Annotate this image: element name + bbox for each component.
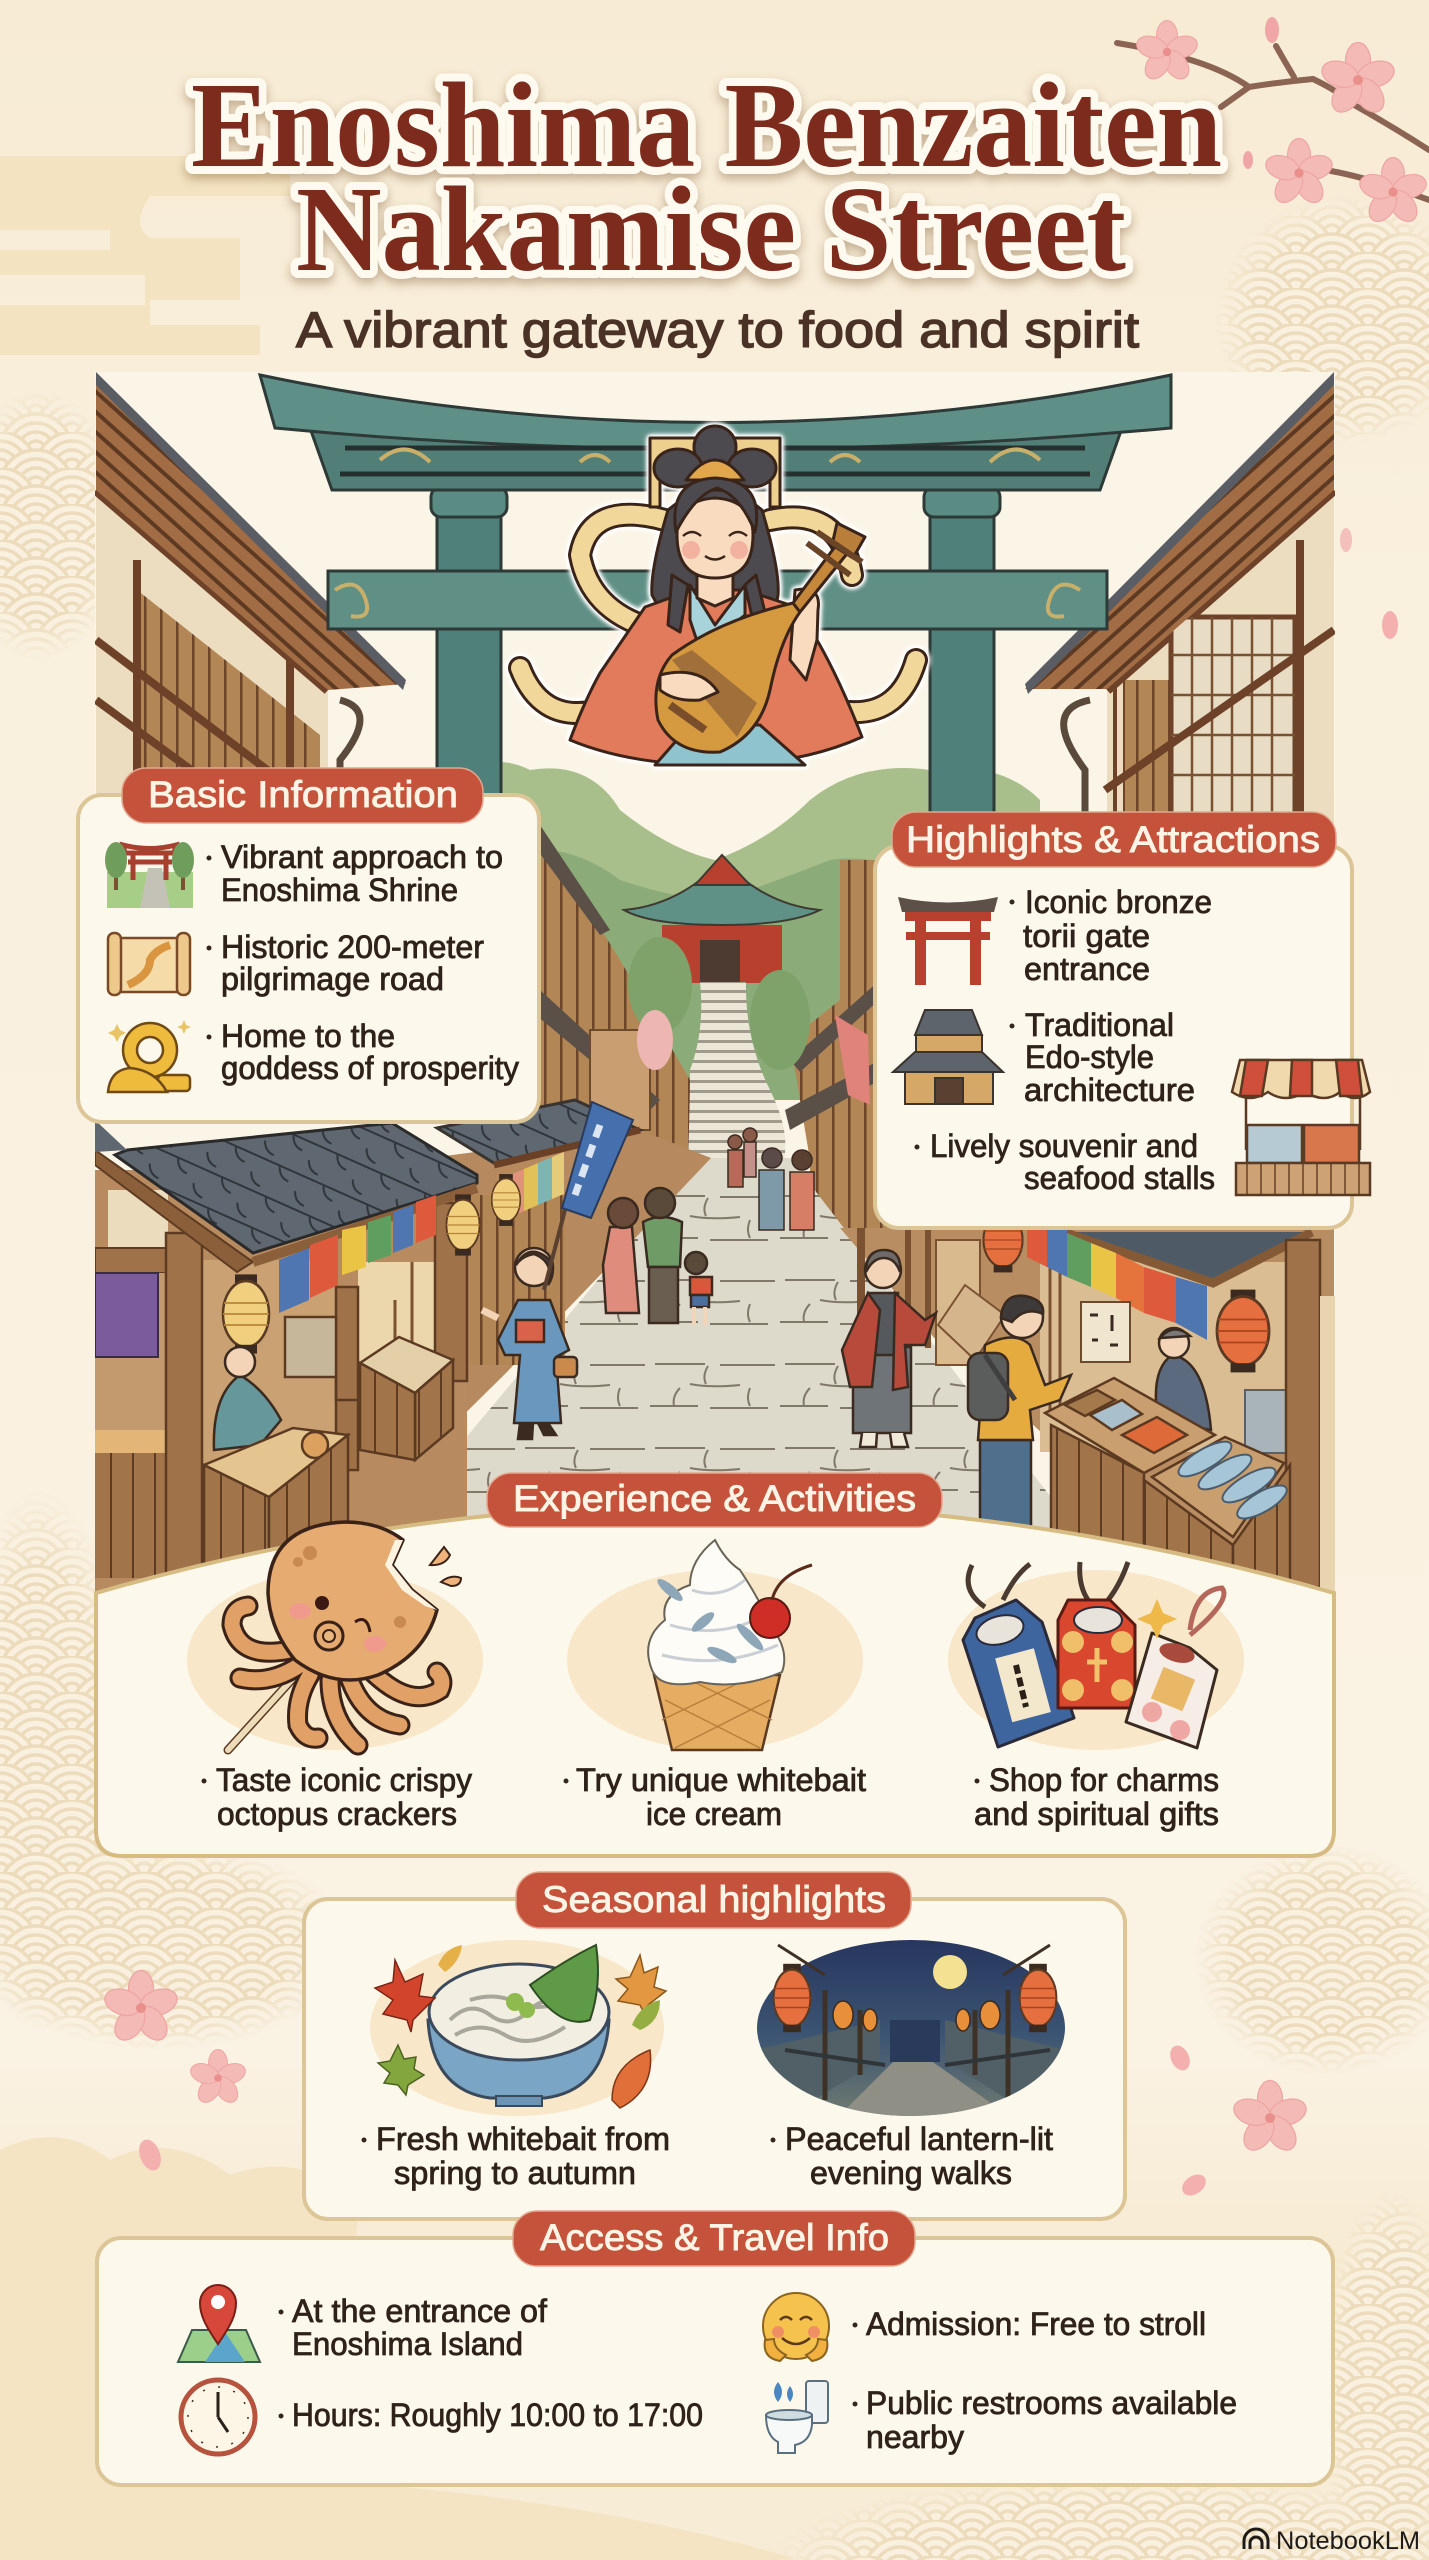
text: restrooms: Public restrooms available: [866, 2385, 1237, 2421]
icon: edo building: [893, 1010, 1003, 1104]
wave pattern lower left: [0, 1858, 316, 2044]
decorative gold cloud top left: [0, 156, 290, 355]
icon: market stall: [1232, 1060, 1370, 1195]
title: Enoshima Benzaiten: [191, 58, 1222, 193]
title: Nakamise Street: [296, 162, 1126, 297]
bunting: [279, 1248, 309, 1313]
text: iconic torii: torii gate: [1023, 918, 1150, 954]
lanterns right: [1217, 1290, 1269, 1372]
text: lantern walks: [770, 2121, 1053, 2191]
text: charms: Shop for charms: [989, 1762, 1219, 1798]
text: lantern walks: evening walks: [810, 2155, 1012, 2191]
text: octopus crackers: [202, 1762, 472, 1832]
text: hours: Hours: Roughly 10:00 to 17:00: [292, 2397, 703, 2433]
wave pattern top right: [1226, 206, 1429, 436]
subtitle: A vibrant gateway to food and spirit: [296, 302, 1139, 358]
text: octopus crackers: octopus crackers: [217, 1796, 457, 1832]
face: [697, 572, 733, 606]
text: whitebait season: Fresh whitebait from: [376, 2121, 670, 2157]
pill: experience: [487, 1473, 942, 1527]
lanterns left: [223, 1274, 269, 1354]
icon: scroll map: [108, 933, 190, 995]
icon: map pin: [178, 2285, 260, 2362]
text: traditional edo: [1010, 1007, 1195, 1108]
icon: smiling face: [763, 2293, 829, 2361]
ribbons: [520, 515, 916, 713]
family walking: [603, 1188, 712, 1325]
text: vibrant approach: Enoshima Shrine: [221, 872, 458, 908]
pill: access: Access & Travel Info: [540, 2217, 889, 2258]
pill: basic information: Basic Information: [148, 774, 458, 815]
icon: clock: [181, 2380, 255, 2454]
right vendor: [1156, 1328, 1211, 1430]
text: lantern walks: Peaceful lantern-lit: [785, 2121, 1053, 2157]
left vendor: [214, 1347, 281, 1450]
wave pattern bottom: [803, 2487, 1429, 2560]
panel: basic information: [78, 768, 539, 1122]
title: [191, 58, 1222, 297]
text: charms: and spiritual gifts: [974, 1796, 1219, 1832]
stone stairs: [688, 982, 785, 1160]
lower right shop: [840, 1228, 1335, 1600]
text: entrance: [278, 2293, 547, 2362]
text: iconic torii: entrance: [1024, 951, 1150, 987]
wave pattern bottom right: [1334, 2209, 1429, 2536]
icon: lantern-lit evening walk: [757, 1940, 1065, 2120]
bronze torii gate: [260, 375, 1171, 835]
far shops left wall: [433, 1098, 711, 1412]
lower gold cloud band: [0, 2137, 800, 2560]
icon: shrine path: [105, 842, 194, 908]
text: souvenir stalls: [914, 1128, 1215, 1196]
wave pattern right: [1195, 1845, 1429, 2075]
text: vibrant approach: [206, 839, 503, 908]
text: admission: Admission: Free to stroll: [866, 2306, 1206, 2342]
text: restrooms: nearby: [866, 2419, 964, 2455]
icon: red torii: [898, 897, 998, 985]
left stalls: [204, 1317, 453, 1585]
forest hills: [502, 762, 1040, 895]
text: whitebait ice cream: Try unique whitebait: [576, 1762, 866, 1798]
street scene illustration: [95, 372, 1335, 1600]
text: home to goddess: Home to the: [221, 1018, 395, 1054]
goddess Benzaiten with biwa: [520, 426, 916, 765]
text: historic road: [206, 929, 484, 997]
pill: seasonal: Seasonal highlights: [542, 1879, 886, 1920]
text: octopus crackers: Taste iconic crispy: [216, 1762, 472, 1798]
text: entrance: At the entrance of: [292, 2293, 547, 2329]
robe: [570, 590, 862, 765]
text: traditional edo: Edo-style: [1025, 1039, 1154, 1075]
text: whitebait ice cream: [564, 1762, 866, 1832]
panel: seasonal highlights: [304, 1872, 1125, 2219]
panel: highlights and attractions: [875, 812, 1370, 1228]
hair strands front: [668, 575, 768, 632]
text: souvenir stalls: seafood stalls: [1024, 1160, 1215, 1196]
decorative sakura blossoms: [101, 528, 1398, 2200]
icon: whitebait bowl with leaves: [370, 1940, 666, 2116]
pill: access: [513, 2211, 915, 2266]
text: vibrant approach: Vibrant approach to: [221, 839, 503, 875]
purple noren: [95, 1273, 158, 1357]
text: charms: [974, 1762, 1219, 1832]
pill: seasonal: [516, 1872, 911, 1928]
text: traditional edo: Traditional: [1025, 1007, 1174, 1043]
text: iconic torii: Iconic bronze: [1025, 884, 1212, 920]
biwa: [656, 603, 800, 752]
right arm: [790, 589, 819, 680]
man in red coat: [842, 1250, 936, 1447]
text: whitebait season: spring to autumn: [394, 2155, 636, 2191]
text: historic road: Historic 200-meter: [221, 929, 484, 965]
cobbled street: [467, 1158, 1050, 1528]
far street buildings right: [785, 860, 890, 1230]
blue banner: [544, 1102, 633, 1290]
man with backpack: [968, 1296, 1071, 1600]
icon: toilet: [766, 2381, 828, 2453]
text: restrooms: [852, 2385, 1237, 2455]
wave pattern upper left: [0, 401, 95, 650]
pill: basic information: [122, 768, 483, 823]
text: souvenir stalls: Lively souvenir and: [930, 1128, 1198, 1164]
upper left building: [95, 372, 406, 794]
wave pattern middle left: [0, 1510, 109, 1999]
icon: omamori charms: [948, 1562, 1244, 1750]
panel: experience and activities: [96, 1473, 1334, 1856]
icon: whitebait ice cream: [567, 1540, 863, 1750]
text: home to goddess: [206, 1018, 519, 1086]
woman in blue kimono: [482, 1248, 577, 1439]
pill: experience: Experience & Activities: [513, 1478, 916, 1519]
text: historic road: pilgrimage road: [221, 961, 444, 997]
distant pedestrians: [728, 1128, 814, 1230]
text: iconic torii: [1010, 884, 1212, 987]
notebooklm watermark: NotebookLM: [1276, 2527, 1420, 2555]
seafood stalls: [1045, 1378, 1291, 1600]
upper right building: [1025, 372, 1334, 830]
icon: gold coins: [108, 1020, 191, 1092]
pill: highlights: [892, 812, 1336, 867]
hair back: [644, 490, 786, 602]
text: whitebait ice cream: ice cream: [646, 1796, 782, 1832]
far street buildings left: [540, 826, 690, 1150]
lower left shop: [95, 1120, 477, 1600]
icon: octopus cracker: [187, 1522, 483, 1750]
text: home to goddess: goddess of prosperity: [221, 1050, 519, 1086]
left hand: [660, 672, 718, 700]
distant shrine: [624, 855, 820, 983]
pill: highlights: Highlights & Attractions: [906, 819, 1320, 860]
cherry blossom branch: [1117, 17, 1429, 227]
crown: [650, 438, 780, 507]
text: traditional edo: architecture: [1024, 1072, 1195, 1108]
trees by stairs: [628, 937, 692, 1033]
text: whitebait season: [362, 2121, 670, 2191]
panel: access and travel info: [97, 2211, 1333, 2485]
hair buns: [694, 426, 736, 468]
text: entrance: Enoshima Island: [292, 2326, 523, 2362]
